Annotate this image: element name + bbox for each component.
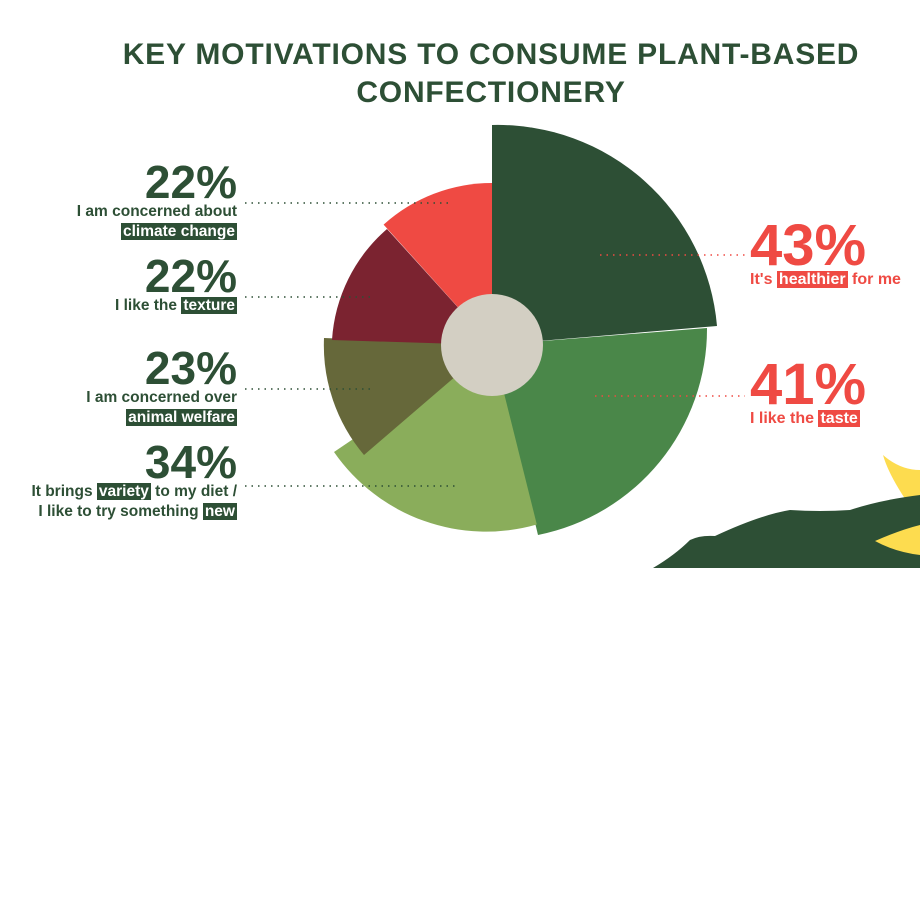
label: texture (115, 250, 237, 314)
wedge: taste (492, 328, 707, 535)
decoration: hill and leaves (653, 455, 920, 568)
wedge: animal welfare (324, 338, 492, 455)
center circle (441, 294, 543, 396)
label: texture: I like the texture (115, 297, 235, 314)
label: climate change: 22% (145, 156, 237, 208)
label: variety: 34% (145, 436, 237, 488)
label: taste: 41% (750, 352, 866, 417)
label: climate change: I am concerned about (77, 203, 237, 220)
label: animal welfare (86, 342, 237, 426)
label: healthier: It's healthier for me (750, 271, 901, 288)
wedge: variety (334, 345, 537, 532)
label: climate change: climate change (123, 223, 235, 240)
label: taste: I like the taste (750, 410, 858, 427)
title: CONFECTIONERY (356, 76, 626, 109)
wedge: healthier (492, 125, 717, 345)
label: healthier (750, 213, 901, 288)
label: texture: 22% (145, 250, 237, 302)
wedge: texture (332, 229, 492, 345)
title: KEY MOTIVATIONS TO CONSUME PLANT-BASED (123, 38, 859, 71)
label: animal welfare: 23% (145, 342, 237, 394)
label: variety (31, 436, 237, 520)
wedge: climate (384, 183, 492, 345)
label: healthier: 43% (750, 213, 866, 278)
label: variety: It brings variety to my diet / (31, 483, 237, 500)
label: animal welfare: I am concerned over (86, 389, 237, 406)
label: animal welfare: animal welfare (128, 409, 235, 426)
label: climate change (77, 156, 237, 240)
label: variety: I like to try something new (38, 503, 235, 520)
title (123, 38, 859, 109)
